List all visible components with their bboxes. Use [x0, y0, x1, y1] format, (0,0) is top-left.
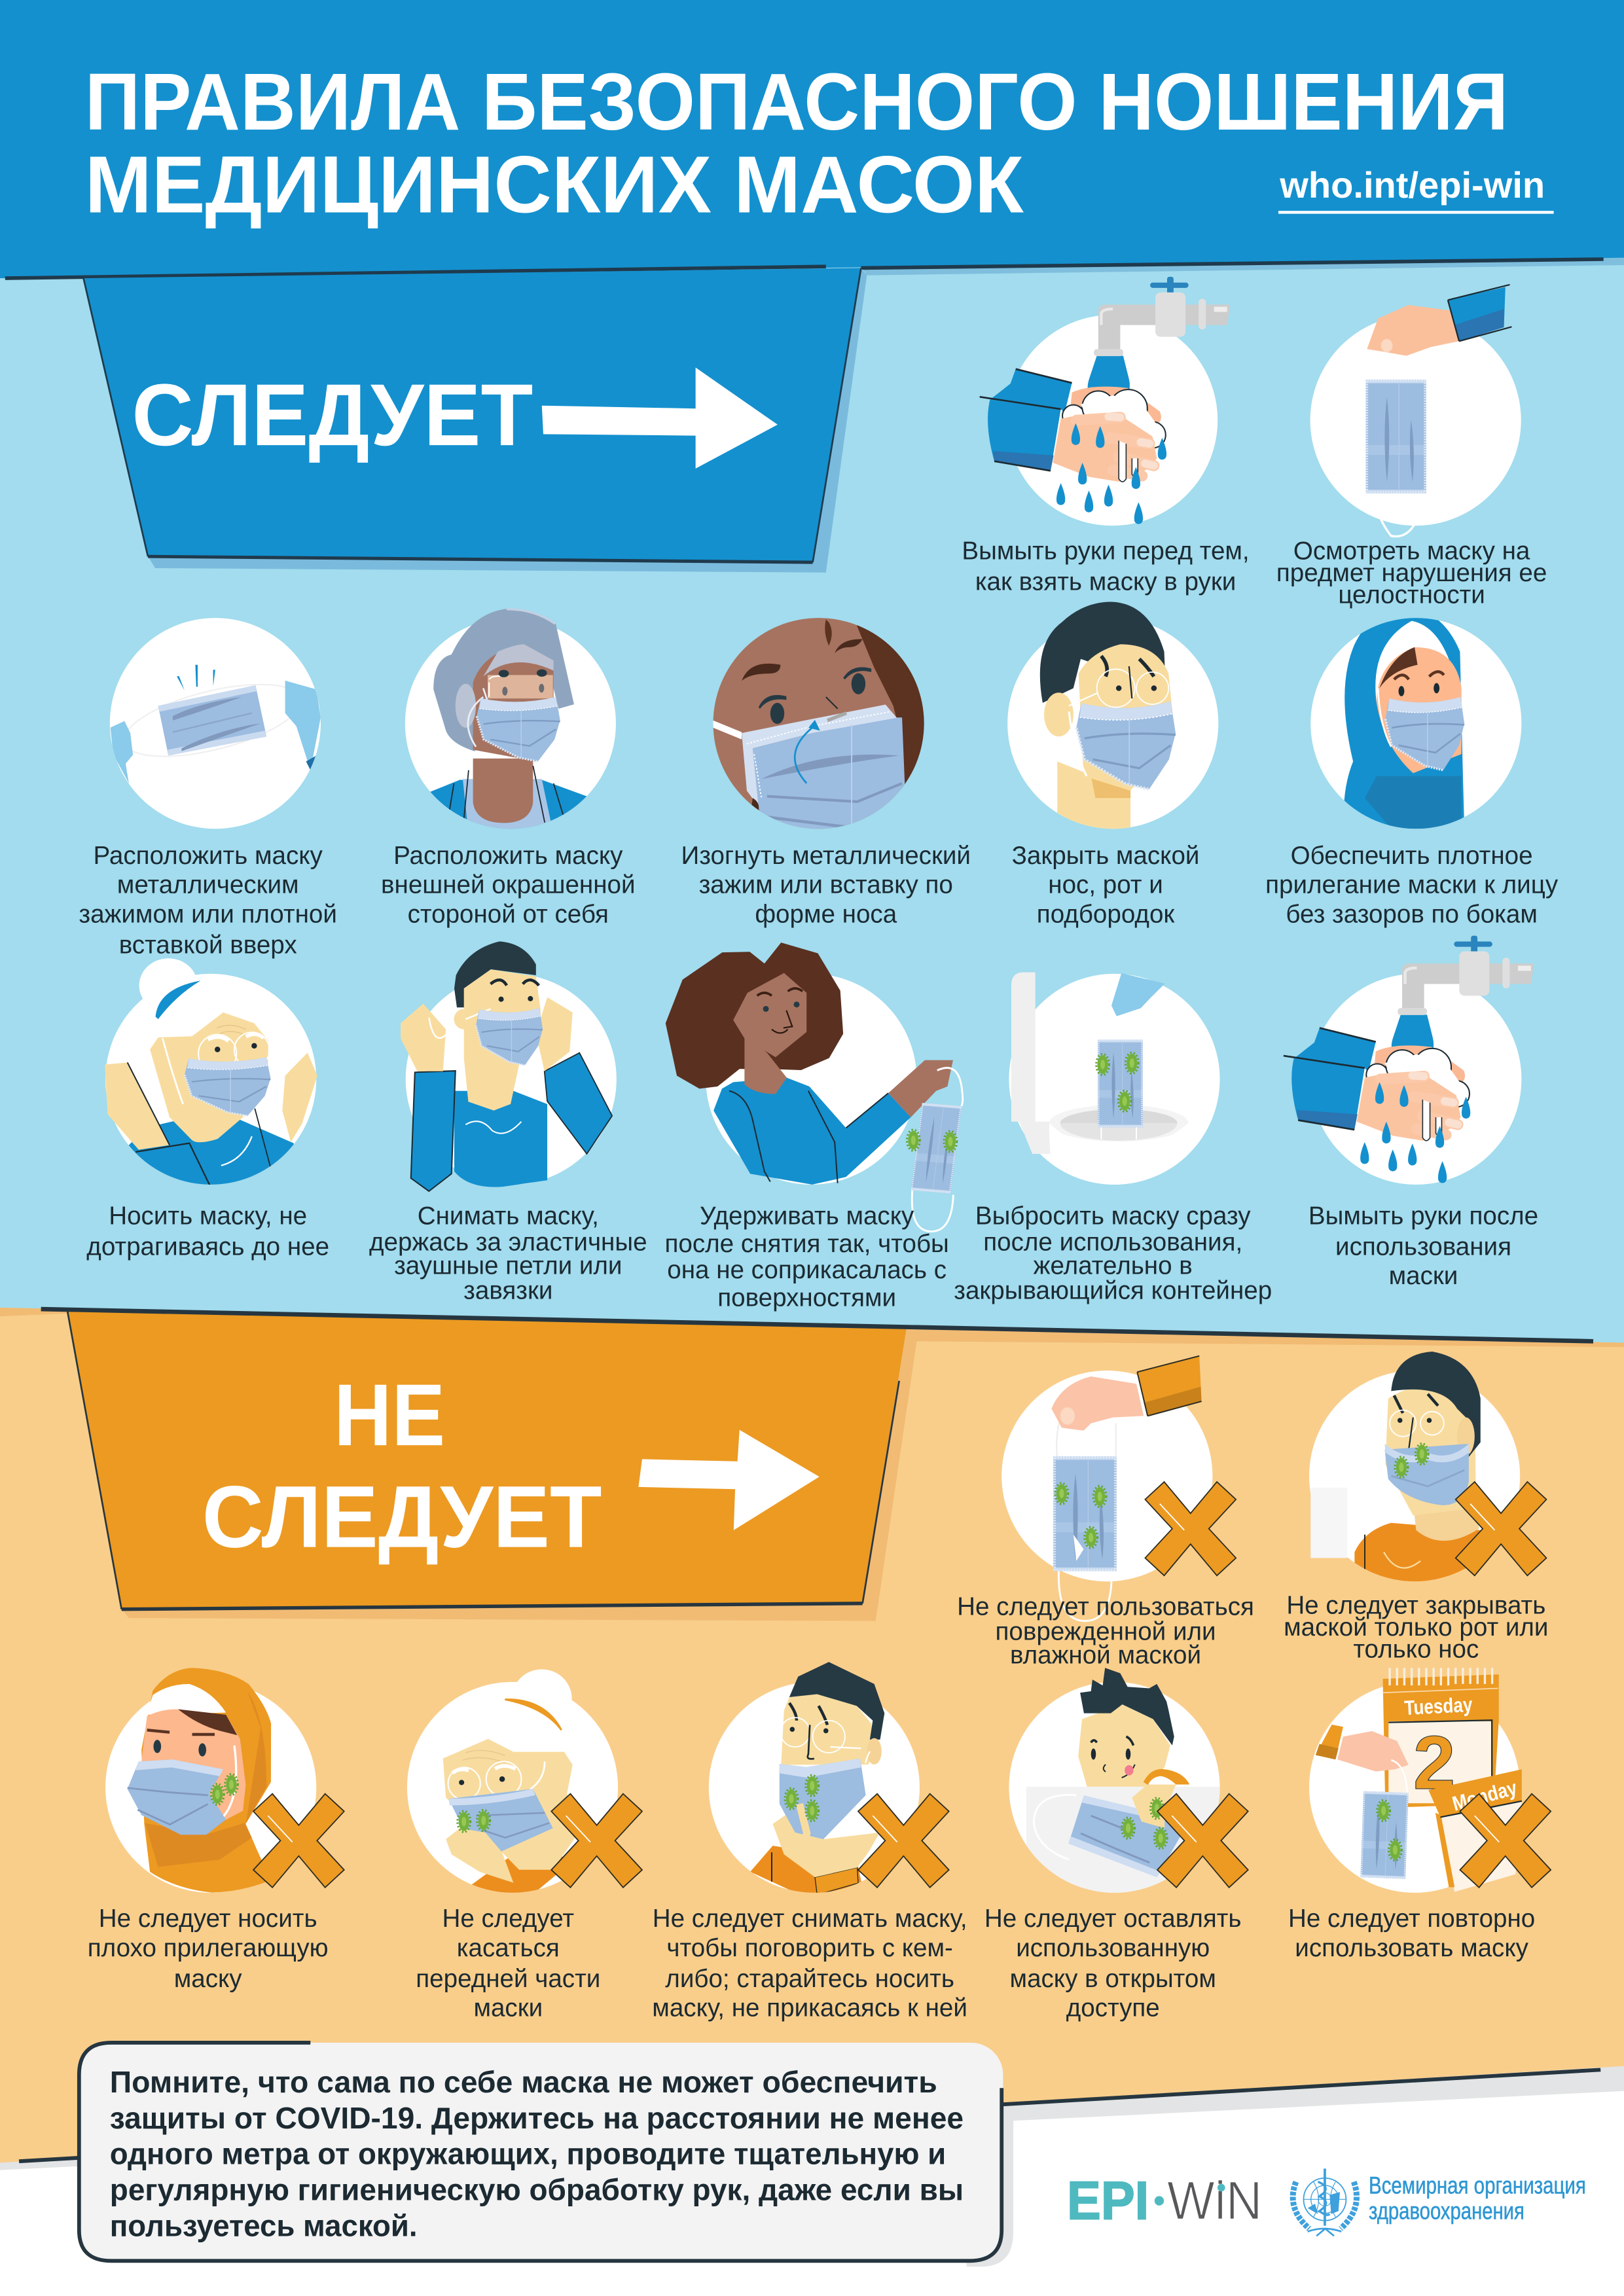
illustration: do not reuse mask: [1309, 1668, 1551, 1893]
caption: Не следует снимать маску,: [653, 1905, 967, 1933]
caption: Закрыть маской: [1012, 842, 1199, 870]
title: МЕДИЦИНСКИХ МАСОК: [85, 140, 1024, 230]
header band: [0, 0, 1624, 278]
illustration: hold removed mask: [666, 942, 963, 1232]
caption: подбородок: [1037, 900, 1175, 928]
caption: прилегание маски к лицу: [1265, 871, 1559, 899]
caption: Носить маску, не: [109, 1202, 307, 1230]
panel: don't banner: [0, 1308, 1624, 1621]
caption: заушные петли или: [394, 1251, 623, 1280]
icon: prohibited cross: [1460, 1794, 1551, 1888]
caption: влажной маской: [1010, 1641, 1201, 1670]
caption: доступе: [1066, 1994, 1160, 2022]
caption: Вымыть руки после: [1308, 1202, 1538, 1230]
caption: Не следует: [442, 1905, 574, 1933]
caption: как взять маску в руки: [975, 568, 1236, 596]
logo: EPI-WiN: [1067, 2170, 1262, 2231]
caption: чтобы поговорить с кем-: [666, 1934, 953, 1962]
caption: только нос: [1353, 1636, 1479, 1664]
caption: вставкой вверх: [119, 931, 297, 959]
icon: prohibited cross: [1145, 1482, 1236, 1575]
caption: после снятия так, чтобы: [665, 1230, 949, 1258]
calendar: 2: [1413, 1720, 1456, 1805]
callout: reminder: [78, 2043, 1013, 2267]
caption: Обеспечить плотное: [1291, 842, 1533, 870]
caption: без зазоров по бокам: [1286, 900, 1538, 928]
callout: reminder: одного метра от окружающих, проводите тщательную и: [110, 2137, 946, 2171]
caption: Удерживать маску: [700, 1202, 914, 1230]
icon: prohibited cross: [551, 1794, 642, 1888]
title: [85, 58, 1508, 230]
caption: Не следует повторно: [1288, 1905, 1535, 1933]
calendar: Monday: [1450, 1776, 1520, 1816]
caption: завязки: [463, 1276, 552, 1304]
caption: маски: [1389, 1262, 1458, 1290]
callout: reminder: защиты от COVID-19. Держитесь на расстоянии не менее: [110, 2101, 964, 2135]
calendar: [1382, 1668, 1522, 1892]
illustration: don't touch mask: [105, 958, 317, 1193]
illustration: do not pull down: [709, 1662, 949, 1897]
caption: внешней окрашенной: [381, 871, 636, 899]
caption: предмет нарушения ее: [1276, 559, 1547, 587]
caption: дотрагиваясь до нее: [86, 1232, 329, 1261]
caption: закрывающийся контейнер: [954, 1276, 1272, 1304]
caption: Не следует пользоваться: [957, 1593, 1254, 1621]
caption: после использования,: [983, 1229, 1242, 1257]
caption: стороной от себя: [408, 900, 609, 928]
caption: использования: [1335, 1232, 1511, 1261]
callout: reminder: Помните, что сама по себе маска не может обеспечить: [110, 2065, 937, 2099]
caption: Расположить маску: [93, 842, 323, 870]
illustration: do not touch front: [407, 1669, 642, 1896]
caption: форме носа: [755, 900, 897, 928]
illustration: poorly fitted mask: [105, 1668, 344, 1893]
illustration: inspect mask: [1310, 285, 1521, 537]
caption: маски: [473, 1994, 543, 2022]
caption: Не следует оставлять: [984, 1905, 1242, 1933]
illustration: washing hands: [980, 277, 1230, 526]
illustration: hold mask metal side up: [110, 618, 321, 829]
caption: касаться: [457, 1934, 560, 1962]
caption: желательно в: [1034, 1251, 1193, 1280]
illustration: dispose mask: [1009, 973, 1220, 1193]
illustration: coloured side outward: [405, 609, 616, 834]
heading: don't: [202, 1366, 602, 1566]
icon: prohibited cross: [1456, 1482, 1546, 1575]
illustration: bend metal strip: [713, 618, 937, 834]
heading: don't: СЛЕДУЕТ: [202, 1468, 602, 1566]
panel: do section background: [0, 249, 1624, 1343]
logo text: WHO name: здравоохранения: [1369, 2197, 1525, 2224]
caption: маску, не прикасаясь к ней: [652, 1994, 967, 2022]
caption: нос, рот и: [1048, 871, 1163, 899]
caption: металлическим: [117, 871, 299, 899]
panel: do banner: [84, 268, 867, 573]
illustration: damaged mask: [1001, 1356, 1236, 1621]
callout: reminder: регулярную гигиеническую обработку рук, даже если вы: [110, 2172, 964, 2206]
heading: do: СЛЕДУЕТ: [132, 366, 533, 464]
caption: Не следует носить: [99, 1905, 317, 1933]
caption: Не следует закрывать: [1286, 1591, 1545, 1619]
illustration: fit mask: [1310, 606, 1521, 829]
caption: она не соприкасалась с: [667, 1256, 947, 1284]
caption: маску: [174, 1965, 242, 1993]
caption: Снимать маску,: [418, 1202, 599, 1230]
caption: плохо прилегающую: [88, 1934, 329, 1962]
icon: prohibited cross: [1157, 1794, 1248, 1888]
illustration: wash hands after: [1284, 936, 1534, 1185]
caption: маской только рот или: [1284, 1613, 1548, 1641]
caption: целостности: [1338, 581, 1485, 609]
caption: поверхностями: [717, 1284, 896, 1312]
caption: Вымыть руки перед тем,: [962, 537, 1250, 565]
title: ПРАВИЛА БЕЗОПАСНОГО НОШЕНИЯ: [85, 58, 1508, 147]
caption: либо; старайтесь носить: [665, 1965, 954, 1993]
caption: использовать маску: [1295, 1934, 1529, 1962]
illustration: cover nose and mouth: [1007, 602, 1218, 834]
website link: who.int/epi-win: [1279, 164, 1545, 206]
illustration: remove by ear loops: [401, 941, 617, 1191]
caption: зажимом или плотной: [79, 900, 337, 928]
caption: Выбросить маску сразу: [975, 1202, 1251, 1230]
caption: Изогнуть металлический: [681, 842, 971, 870]
caption: маску в открытом: [1010, 1965, 1216, 1993]
caption: использованную: [1016, 1934, 1210, 1962]
arrow: don't: [638, 1430, 820, 1530]
callout: reminder: пользуетесь маской.: [110, 2208, 418, 2242]
caption: Расположить маску: [393, 842, 623, 870]
caption: зажим или вставку по: [699, 871, 953, 899]
icon: prohibited cross: [253, 1794, 344, 1888]
logo text: WHO name: [1369, 2172, 1586, 2224]
icon: prohibited cross: [858, 1794, 949, 1888]
calendar: Tuesday: [1404, 1693, 1473, 1719]
arrow: do: [542, 368, 778, 469]
caption: Осмотреть маску на: [1293, 537, 1530, 565]
heading: don't: НЕ: [334, 1366, 445, 1464]
logo: WHO emblem: [1293, 2168, 1357, 2236]
illustration: mouth only: [1309, 1352, 1546, 1588]
panel: footer peach boundary: [0, 1289, 1624, 2170]
illustration: used mask in open: [1009, 1668, 1248, 1897]
logo: EPI-WiN: WiN: [1167, 2170, 1262, 2231]
logo: EPI-WiN: EPI: [1067, 2170, 1149, 2231]
caption: держась за эластичные: [369, 1229, 647, 1257]
caption: поврежденной или: [996, 1618, 1216, 1646]
caption: передней части: [416, 1965, 600, 1993]
